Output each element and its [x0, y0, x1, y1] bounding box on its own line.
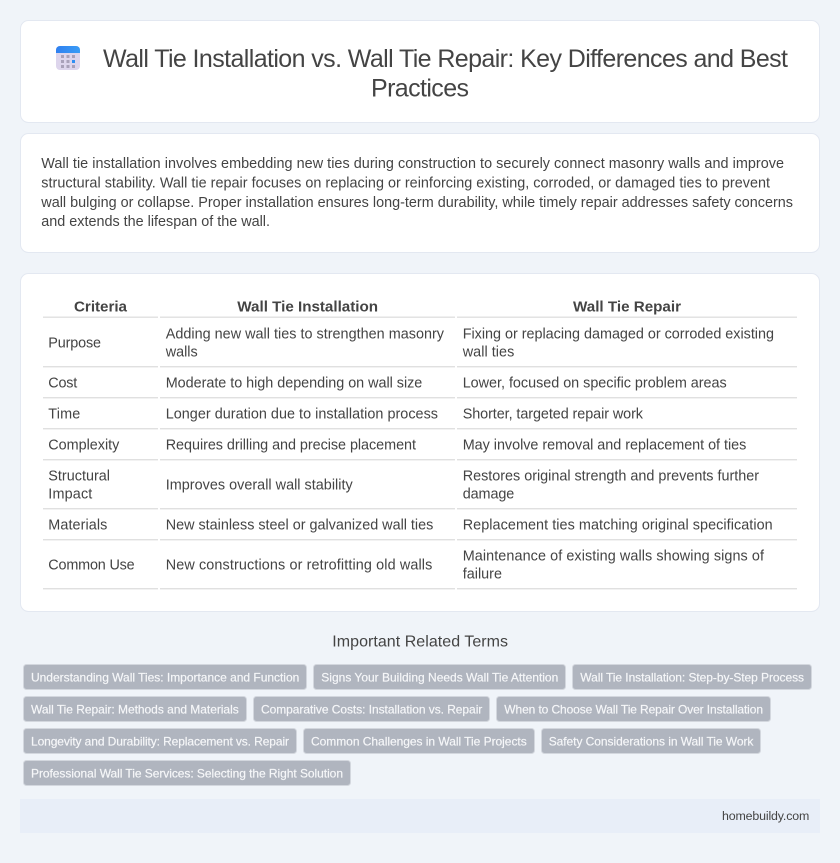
table row: cost	[43, 376, 797, 398]
tag: repair methods	[24, 696, 246, 722]
panel: header	[20, 20, 820, 122]
text block: introduction paragraph: structural stability. Wall tie repair focuses on replacing or reinforcing existing, corroded, or damaged ties to prevent	[41, 175, 770, 191]
table row: structural impact: Impact	[48, 486, 92, 502]
table row: cost: Moderate to high depending on wall size	[166, 376, 422, 392]
panel: introduction	[20, 134, 820, 252]
table row: structural impact: Structural	[48, 469, 110, 485]
tag: safety considerations: Safety Considerations in Wall Tie Work	[549, 734, 754, 748]
tag: repair methods: Wall Tie Repair: Methods and Materials	[31, 702, 239, 716]
table row: purpose: wall ties	[462, 345, 514, 361]
table row: cost: Lower, focused on specific problem areas	[463, 376, 727, 392]
panel: comparison table	[20, 274, 820, 612]
table row: structural impact	[43, 469, 797, 509]
text block: introduction paragraph: Wall tie installation involves embedding new ties during construction to securely connect masonry walls and improve	[41, 156, 784, 172]
text block: introduction paragraph	[40, 156, 793, 230]
table row: materials: Replacement ties matching original specification	[463, 518, 773, 534]
table row: purpose: Fixing or replacing damaged or corroded existing	[463, 327, 774, 343]
table row: common use	[43, 549, 797, 589]
tag: when to choose repair	[496, 696, 770, 722]
table row: structural impact: Restores original strength and prevents further	[463, 469, 759, 485]
table row: time: Time	[48, 406, 80, 422]
tag: when to choose repair: When to Choose Wall Tie Repair Over Installation	[504, 702, 763, 716]
tag: signs your building needs attention: Signs Your Building Needs Wall Tie Attention	[321, 670, 558, 684]
tag: signs your building needs attention	[314, 664, 566, 690]
tag: comparative costs	[254, 696, 490, 722]
title: Wall Tie Installation vs. Wall Tie Repair: Key Differences and Best	[103, 45, 788, 73]
footer source: homebuildy.com: homebuildy.com	[722, 809, 809, 823]
table row: materials	[43, 518, 797, 540]
tag: professional services: Professional Wall Tie Services: Selecting the Right Solution	[31, 766, 343, 780]
title: Practices	[371, 74, 469, 102]
tag: safety considerations	[542, 728, 760, 754]
text block: introduction paragraph: and extends the lifespan of the wall.	[41, 214, 270, 230]
table row: purpose: Adding new wall ties to strengthen masonry	[166, 327, 445, 343]
title	[103, 45, 788, 102]
tag: comparative costs: Comparative Costs: Installation vs. Repair	[261, 702, 482, 716]
heading: important related terms: Important Related Terms	[332, 634, 508, 651]
tag: longevity and durability	[24, 728, 296, 754]
table row: complexity: Requires drilling and precise placement	[166, 438, 416, 454]
text block: introduction paragraph: wall bulging or collapse. Proper installation ensures long-term durability, while timely repair addresses safety concerns	[40, 195, 793, 211]
tag: common challenges: Common Challenges in Wall Tie Projects	[311, 734, 527, 748]
icon: calendar grid	[56, 46, 80, 70]
tag: understanding wall ties: Understanding Wall Ties: Importance and Function	[31, 670, 299, 684]
table row: materials: New stainless steel or galvanized wall ties	[166, 518, 433, 534]
table row: structural impact: Improves overall wall stability	[166, 478, 353, 494]
table row: common use: Maintenance of existing walls showing signs of	[463, 549, 765, 565]
table row: cost: Cost	[48, 376, 77, 392]
related terms tags	[24, 664, 812, 786]
table row: common use: New constructions or retrofitting old walls	[166, 558, 432, 574]
tag: longevity and durability: Longevity and Durability: Replacement vs. Repair	[31, 734, 289, 748]
table header row: Criteria	[74, 299, 128, 316]
footer	[20, 799, 820, 833]
table row: materials: Materials	[48, 518, 107, 534]
table row: purpose: Purpose	[48, 336, 101, 352]
table row: time	[43, 406, 797, 429]
table header row	[43, 299, 797, 318]
tag: installation process	[572, 664, 812, 690]
table header row: Wall Tie Repair	[573, 299, 681, 316]
table row: purpose	[43, 327, 797, 367]
table row: complexity	[43, 438, 797, 460]
table header row: Wall Tie Installation	[237, 299, 378, 316]
table row: common use: failure	[463, 566, 502, 582]
tag: installation process: Wall Tie Installation: Step-by-Step Process	[580, 670, 804, 684]
table row: time: Shorter, targeted repair work	[463, 406, 644, 422]
table row: complexity: Complexity	[48, 438, 120, 454]
table row: purpose: walls	[165, 345, 198, 361]
table row: complexity: May involve removal and replacement of ties	[463, 438, 746, 454]
tag: understanding wall ties	[24, 664, 306, 690]
tag: common challenges	[304, 728, 534, 754]
table row: structural impact: damage	[463, 486, 514, 502]
table row: common use: Common Use	[48, 558, 135, 574]
table row: time: Longer duration due to installation process	[166, 406, 438, 422]
tag: professional services	[24, 760, 350, 786]
